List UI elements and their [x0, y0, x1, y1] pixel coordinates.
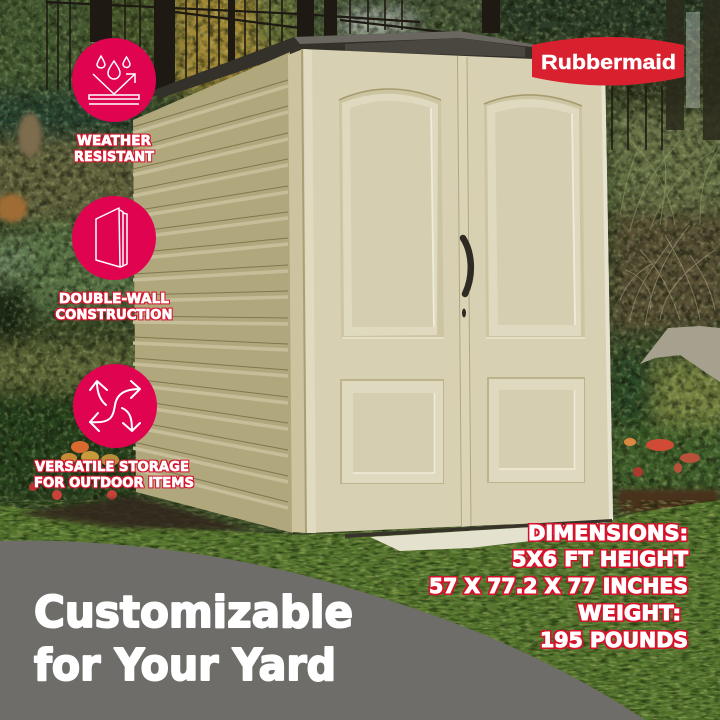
mulch strip	[15, 496, 250, 530]
label: RESISTANT	[74, 150, 154, 165]
right upper panel	[484, 95, 585, 339]
label: FOR OUTDOOR ITEMS	[34, 476, 194, 491]
left upper panel	[339, 89, 444, 339]
feature: versatile storage	[34, 364, 194, 491]
feature: weather resistant	[72, 38, 156, 165]
dimensions text block	[429, 521, 688, 652]
dimensions text block: WEIGHT:	[578, 601, 681, 625]
title: Customizable	[34, 587, 353, 638]
label: WEATHER	[77, 134, 151, 149]
label: CONSTRUCTION	[56, 308, 172, 323]
corner post	[288, 49, 307, 533]
rock	[640, 326, 720, 382]
dimensions text block: 57 X 77.2 X 77 INCHES	[429, 574, 688, 598]
right lower panel	[487, 377, 585, 483]
logo: Rubbermaid: Rubbermaid	[541, 52, 676, 74]
grey title panel	[0, 541, 645, 720]
lock	[462, 308, 466, 318]
icon: four curved arrows	[73, 364, 157, 448]
title: for Your Yard	[34, 640, 336, 691]
ornamental grass	[620, 225, 715, 325]
icon: water drops and surface	[72, 38, 156, 122]
dimensions text block: DIMENSIONS:	[528, 521, 688, 545]
dimensions text block: 5X6 FT HEIGHT	[512, 547, 688, 571]
left lower panel	[340, 379, 444, 484]
front doors	[303, 49, 613, 533]
feature: double-wall construction	[56, 196, 172, 323]
door threshold	[345, 519, 612, 538]
lawn	[0, 500, 720, 720]
shed	[133, 31, 613, 538]
title	[34, 587, 353, 691]
label	[34, 460, 194, 491]
label: DOUBLE-WALL	[59, 292, 169, 307]
dimensions text block: 195 POUNDS	[540, 628, 688, 652]
shed side wall	[133, 52, 293, 533]
fence and tree trunks	[46, 0, 720, 150]
door handle	[463, 238, 471, 294]
label: VERSATILE STORAGE	[35, 460, 189, 475]
concrete pad	[370, 522, 612, 551]
roof	[154, 31, 537, 99]
label	[56, 292, 172, 323]
icon: double wall panel	[72, 196, 156, 280]
label	[74, 134, 154, 165]
logo: Rubbermaid	[532, 37, 684, 86]
flower beds and mulch	[0, 113, 718, 512]
door seam	[457, 56, 471, 527]
